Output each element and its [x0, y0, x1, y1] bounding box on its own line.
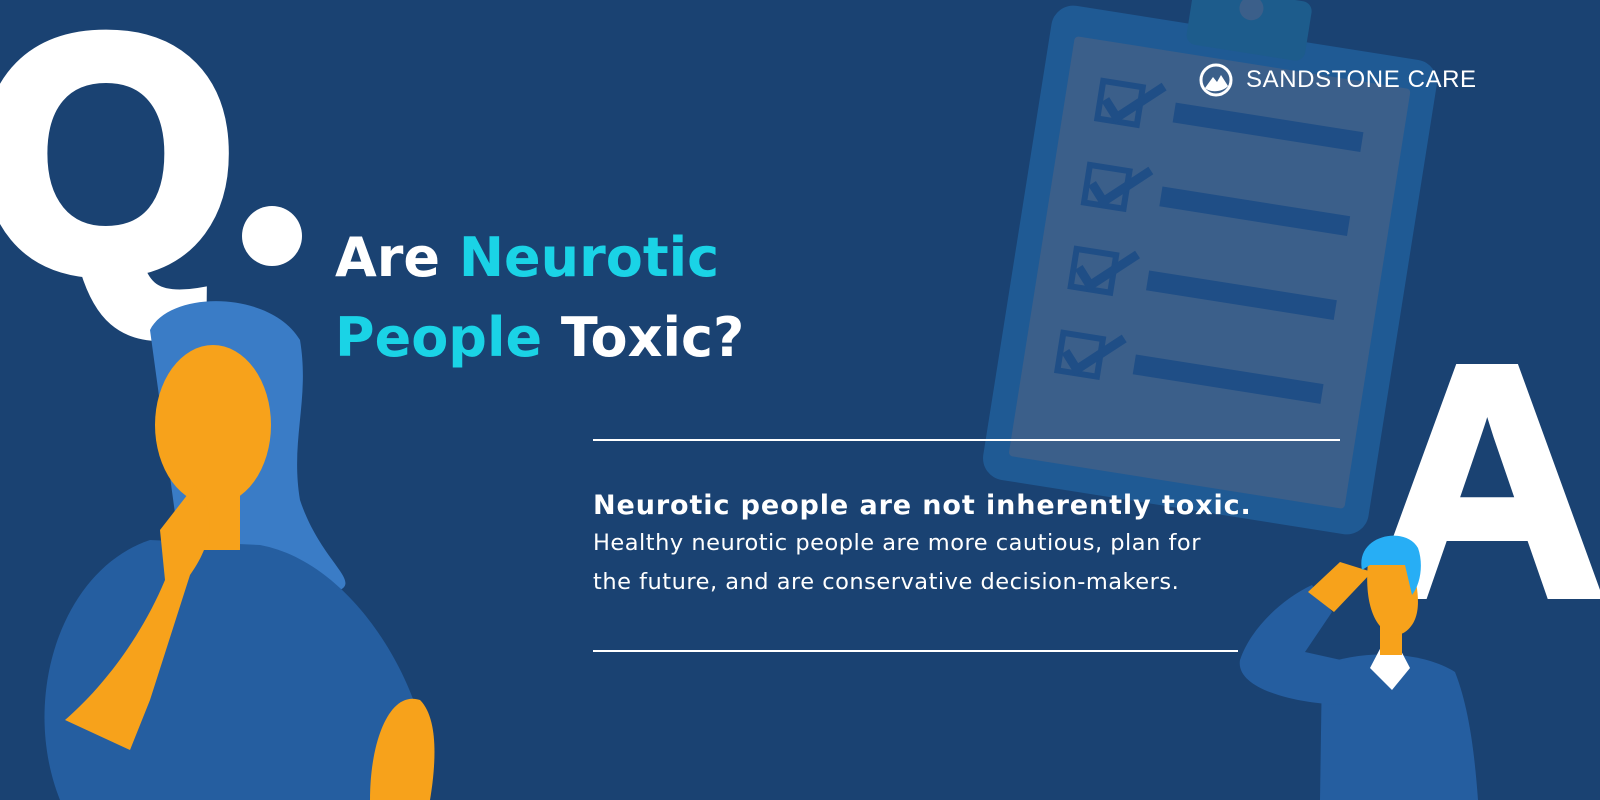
logo: [1200, 64, 1477, 96]
answer text: Healthy neurotic people are more cautious, plan for: [593, 530, 1201, 556]
answer text: [593, 490, 1252, 595]
title: Are Neurotic: [335, 226, 719, 289]
letter A: A: [1368, 296, 1600, 665]
clipboard: [980, 0, 1446, 538]
divider bottom: [593, 650, 1238, 652]
answer text: Neurotic people are not inherently toxic.: [593, 490, 1252, 521]
divider top: [593, 439, 1340, 441]
answer text: the future, and are conservative decision-makers.: [593, 569, 1179, 595]
title: [335, 226, 744, 369]
logo: SANDSTONE CARE: [1246, 66, 1477, 93]
woman: [44, 301, 434, 800]
man: [1240, 536, 1478, 800]
title: People Toxic?: [335, 306, 744, 369]
